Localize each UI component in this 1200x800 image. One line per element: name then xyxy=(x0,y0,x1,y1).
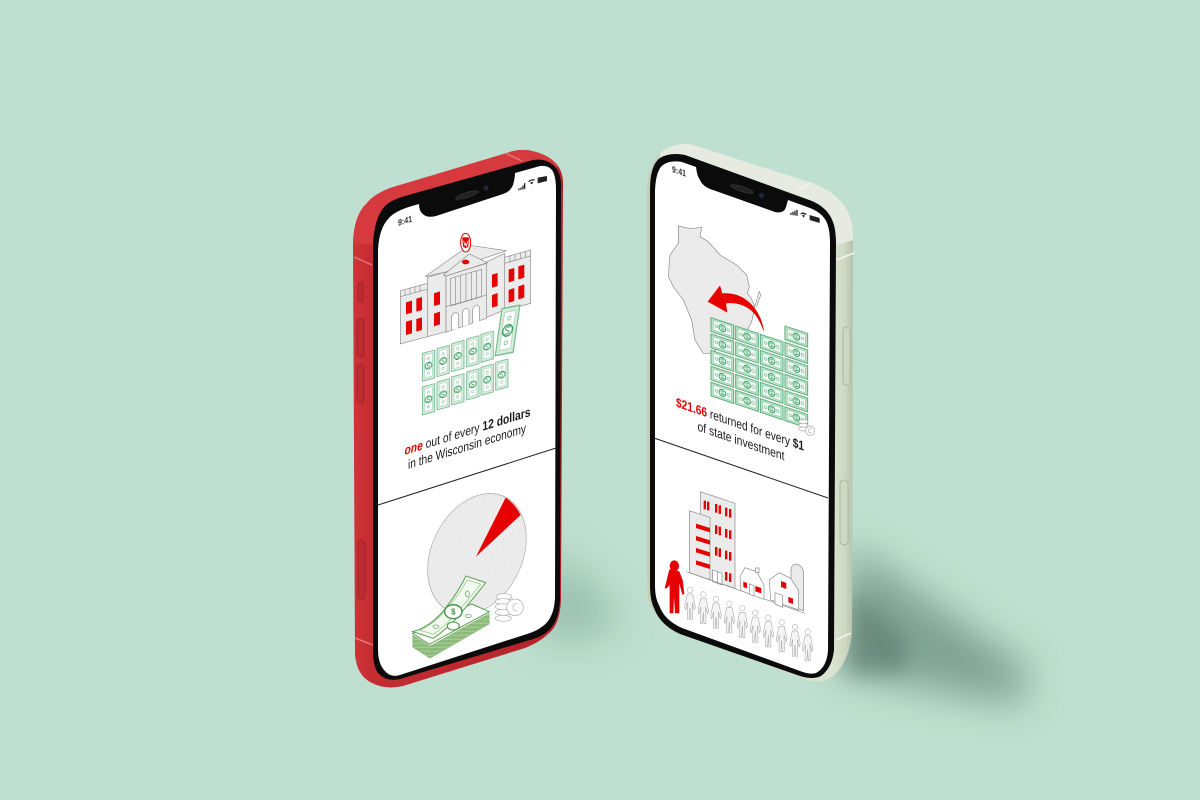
status time: 9:41 xyxy=(398,214,412,228)
status time: 9:41 xyxy=(672,164,686,179)
bezel xyxy=(373,160,561,680)
university crest xyxy=(461,233,471,252)
caption left: in the Wisconsin economy xyxy=(408,421,526,472)
divider left xyxy=(378,448,556,505)
caption left: one out of every 12 dollars xyxy=(404,404,531,458)
screen with notch xyxy=(378,166,556,676)
caption right: $21.66 returned for every $1 xyxy=(676,395,804,454)
phone body: red xyxy=(353,150,563,687)
antenna bands xyxy=(797,183,854,640)
city and farm illustration xyxy=(687,492,805,613)
notch speaker and camera xyxy=(730,183,764,198)
cash stack and coins xyxy=(413,576,523,658)
side buttons xyxy=(357,282,365,599)
Wisconsin map xyxy=(668,226,761,353)
red curved arrow xyxy=(708,285,764,331)
building illustration xyxy=(400,233,531,344)
top highlight band xyxy=(353,150,558,245)
bezel xyxy=(650,154,836,678)
red building windows xyxy=(696,501,731,582)
screen with notch xyxy=(655,161,830,674)
pie chart xyxy=(428,480,526,628)
red windows xyxy=(406,260,524,335)
pie wedge xyxy=(476,498,521,557)
phone body: cream xyxy=(647,144,853,682)
large tilted bill xyxy=(495,305,520,356)
top highlight band xyxy=(660,144,853,245)
side buttons xyxy=(840,327,850,545)
large red person xyxy=(665,560,684,613)
coins xyxy=(495,594,523,621)
phone shadows xyxy=(535,545,1030,705)
returned dollars grid xyxy=(711,318,808,428)
dollar bill grid xyxy=(422,305,520,415)
divider right xyxy=(654,438,828,498)
left red phone xyxy=(353,150,563,687)
notch speaker and camera xyxy=(455,186,488,201)
antenna bands xyxy=(354,153,522,645)
small coins xyxy=(799,420,815,435)
status icons xyxy=(518,176,547,190)
cash stack and coins: $ xyxy=(451,608,456,617)
row of people xyxy=(685,587,813,661)
house xyxy=(740,568,764,599)
status icons xyxy=(790,210,820,223)
barn and silo xyxy=(769,564,804,611)
right cream phone xyxy=(647,144,854,682)
caption right: of state investment xyxy=(698,419,785,464)
